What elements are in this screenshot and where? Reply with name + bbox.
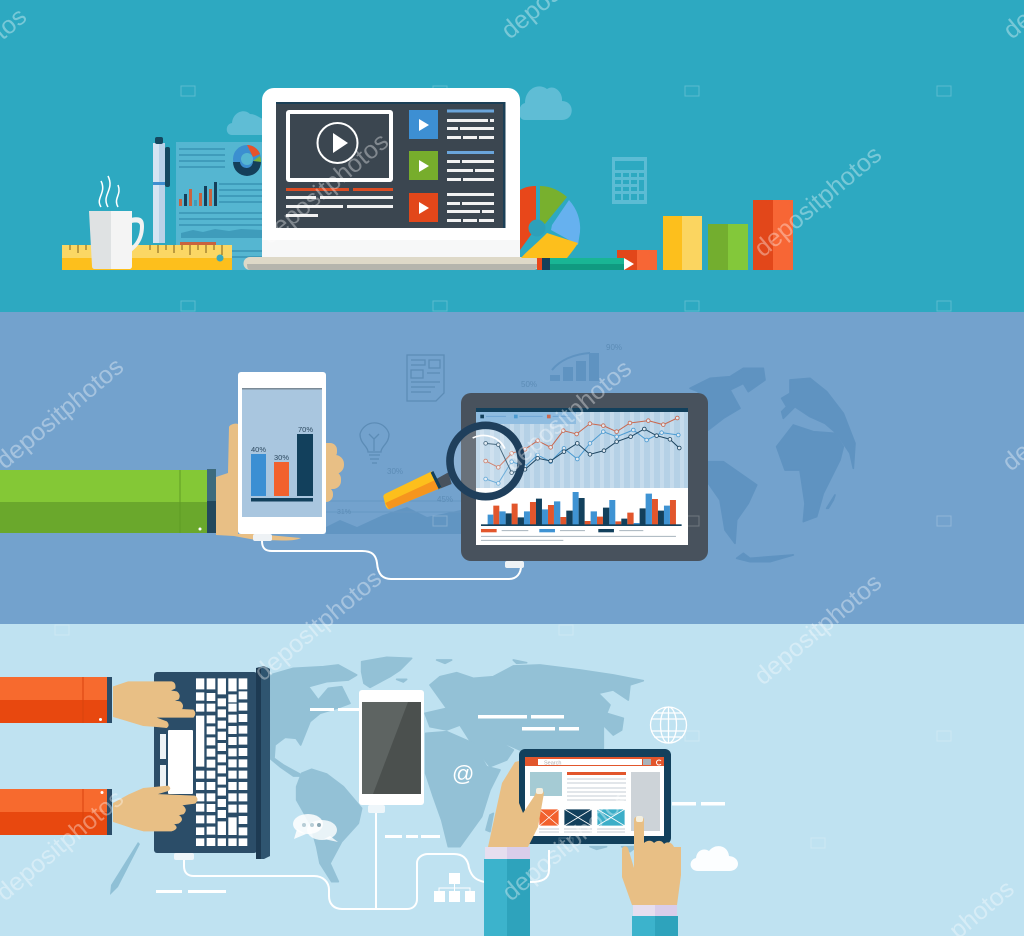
world map [270, 657, 643, 882]
watermarks: depositphotos [749, 568, 887, 691]
laptop screen [276, 102, 506, 228]
browser header [525, 757, 664, 766]
column chart [481, 492, 682, 526]
yellow block [663, 216, 702, 270]
line chart [486, 418, 679, 483]
faded hills chart [326, 495, 461, 534]
phone connector [253, 534, 272, 541]
smartphone [359, 690, 424, 813]
icon: chat bubbles [293, 814, 338, 842]
lower red sleeve [0, 789, 112, 835]
faded percent labels: 90% [606, 343, 622, 352]
chart footer legend [481, 529, 676, 540]
data dashes [156, 708, 725, 893]
icon: sitemap [434, 873, 475, 902]
blue video tile [409, 110, 438, 139]
small red block [617, 250, 657, 270]
icon: growth bars [550, 353, 599, 381]
playlist text lines [447, 110, 494, 154]
watermarks: depositphotos [499, 354, 637, 477]
upper red sleeve [0, 677, 112, 723]
red video tile [409, 193, 438, 222]
green block [708, 224, 748, 270]
panel: office desk with laptop [0, 0, 1024, 312]
icon: donut chart on document [233, 145, 261, 176]
phone bar chart: 70% [298, 425, 313, 434]
faded percent labels [387, 343, 622, 476]
icon: stylus [110, 842, 140, 895]
lower hand [113, 786, 197, 831]
video caption lines [286, 188, 393, 191]
icon: wire globe [650, 707, 686, 743]
email thumbnails [539, 809, 625, 826]
phone bar chart [251, 425, 313, 502]
tablet with browser [519, 749, 671, 844]
watermarks: depositphotos [256, 127, 394, 250]
right hand pointing [622, 816, 681, 936]
faded percent labels: 50% [521, 380, 537, 389]
panel: analytics on phone and tablet [0, 312, 1024, 624]
faded hills chart: 31% [337, 509, 351, 516]
keyboard keys [196, 678, 247, 846]
phone bar chart: 40% [251, 445, 266, 454]
panel: devices across the world [0, 624, 1024, 936]
cables [184, 805, 549, 910]
left hand holding tablet [484, 761, 544, 936]
sleeves and hands at laptop [0, 666, 270, 860]
faded percent labels: 30% [387, 467, 403, 476]
tablet charts [383, 415, 682, 540]
phone bar chart: 30% [274, 453, 289, 462]
icon: small cloud [227, 111, 263, 135]
small bar chart on document [179, 182, 217, 206]
browser header: Search [544, 760, 561, 766]
tablet [383, 393, 708, 568]
document with charts [176, 142, 263, 270]
tall red block [753, 200, 793, 270]
watermarks: depositphotos [749, 140, 887, 263]
icon: pencil [537, 258, 634, 270]
icon: yellow ruler [62, 242, 232, 270]
world globe [690, 368, 855, 562]
faded hills chart: 45% [437, 495, 453, 504]
magnifying glass [383, 425, 521, 509]
laptop base [244, 257, 540, 270]
watermark camera marks [55, 86, 951, 848]
phone [238, 372, 326, 541]
icon: white cloud [691, 846, 738, 871]
browser content [530, 772, 660, 832]
video player [288, 112, 391, 180]
icon: pen [153, 137, 170, 243]
upper hand [113, 682, 195, 728]
hand holding phone [216, 424, 344, 540]
green sleeve [0, 469, 216, 533]
cable [262, 541, 521, 579]
green video tile [409, 151, 438, 180]
icon: coffee mug with steam [89, 176, 144, 269]
tablet connector [505, 561, 524, 568]
laptop [244, 88, 540, 270]
icon: at sign: @ [452, 761, 474, 786]
watermarks: depositphotos [497, 784, 635, 907]
pie chart [520, 186, 580, 258]
icon: light bulb [360, 423, 389, 463]
laptop keyboard [154, 666, 270, 860]
icon: newspaper [407, 355, 444, 401]
icon: calculator [612, 157, 647, 204]
icon: large cloud [519, 86, 572, 120]
chart legend [480, 415, 569, 418]
watermarks: depositphotos [249, 564, 387, 687]
